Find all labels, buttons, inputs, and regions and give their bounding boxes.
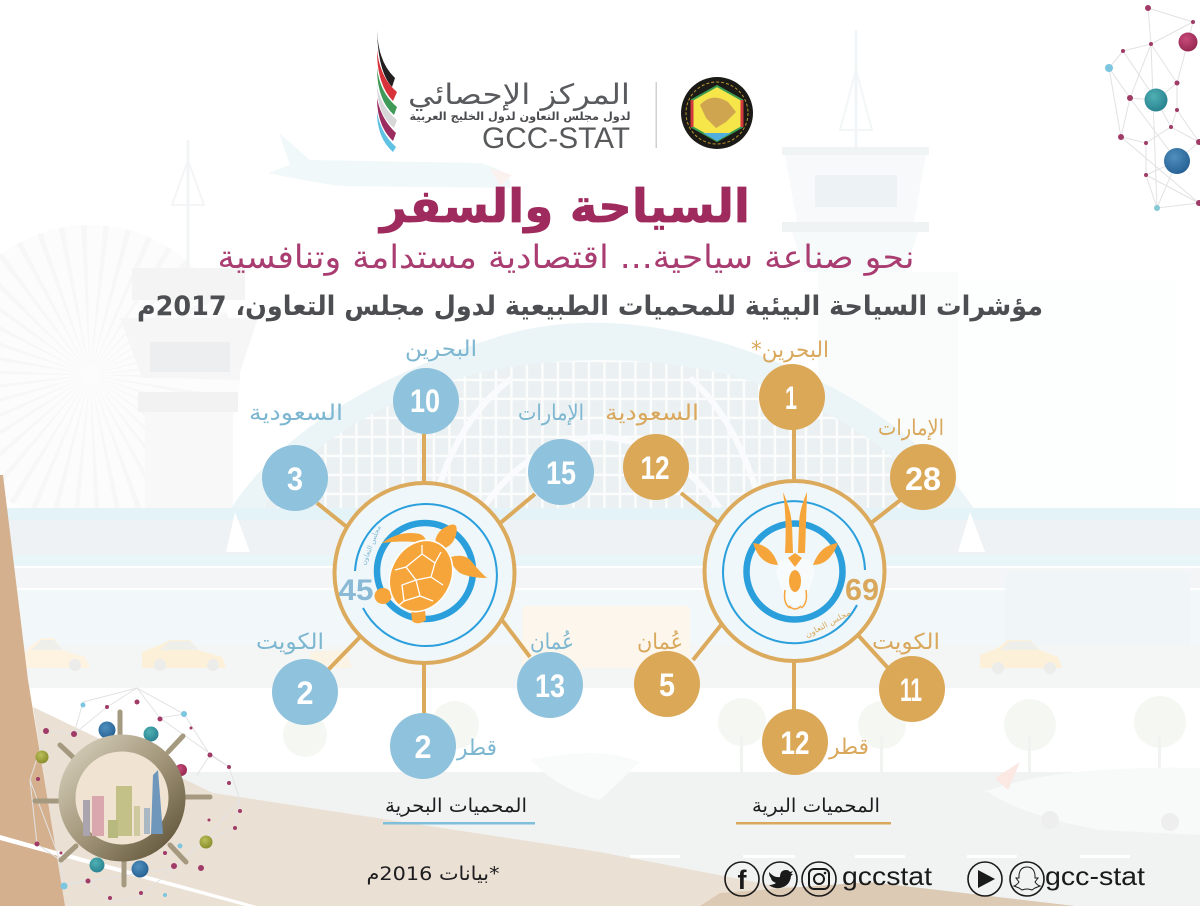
network decoration: top right xyxy=(1105,5,1200,211)
node: UAE: الإمارات xyxy=(878,416,944,441)
icon: facebook xyxy=(725,862,759,896)
hub caption: مجلس التعاون xyxy=(360,524,383,566)
node: Oman: 5 xyxy=(659,667,675,703)
node: Saudi Arabia: السعودية xyxy=(605,401,699,426)
spokes xyxy=(317,430,535,716)
node: Oman xyxy=(634,630,700,717)
node: Saudi Arabia: 3 xyxy=(287,461,303,497)
taxis xyxy=(25,638,1062,674)
icon: snapchat xyxy=(1010,862,1044,896)
network dots xyxy=(34,700,242,900)
logo ribbon stripes xyxy=(377,30,397,152)
left plane wing xyxy=(530,753,640,800)
hub xyxy=(704,481,884,661)
logo: GCC-STAT xyxy=(377,30,753,155)
parked plane xyxy=(985,762,1200,835)
wheel handles xyxy=(35,712,210,885)
title: السياحة والسفر xyxy=(378,179,750,233)
node: Saudi Arabia xyxy=(249,401,343,511)
node: UAE xyxy=(518,401,594,505)
node: Kuwait: الكويت xyxy=(256,630,324,655)
top plane xyxy=(268,133,512,188)
caption: land reserves: المحميات البرية xyxy=(752,795,880,817)
node: Kuwait: الكويت xyxy=(872,630,940,655)
node: Qatar: قطر xyxy=(456,736,497,761)
chart: marine reserves xyxy=(249,337,594,824)
node: Kuwait: 11 xyxy=(900,672,922,708)
node: Oman: عُمان xyxy=(530,630,574,655)
icon: oryx xyxy=(753,492,838,609)
chart: land reserves xyxy=(605,338,956,824)
terminal facade bands xyxy=(6,508,1200,688)
node: Saudi Arabia: 12 xyxy=(640,450,670,486)
icon: turtle xyxy=(374,524,487,623)
node: Bahrain xyxy=(751,338,829,430)
node: Kuwait xyxy=(872,630,945,722)
spokes xyxy=(681,428,903,712)
terminal dome xyxy=(230,323,975,510)
node: Qatar: 12 xyxy=(780,725,810,761)
wheel ring xyxy=(67,743,177,853)
node: UAE xyxy=(878,416,956,510)
caption: marine reserves: المحميات البحرية xyxy=(385,795,527,817)
wheel network xyxy=(30,688,240,902)
icon: twitter xyxy=(763,862,797,896)
handle: gcc-stat: gcc-stat xyxy=(1045,861,1146,891)
node: Saudi Arabia: السعودية xyxy=(249,401,343,426)
node: Oman: 13 xyxy=(535,668,565,704)
icon: youtube xyxy=(968,862,1002,896)
node: UAE: 28 xyxy=(905,461,941,497)
node: Saudi Arabia xyxy=(605,401,699,500)
bottom tan ground xyxy=(0,475,1075,906)
node: Qatar xyxy=(762,709,869,775)
network balls xyxy=(98,722,116,738)
right control tower xyxy=(782,30,1175,510)
node: Kuwait xyxy=(256,630,338,725)
node: Qatar: 2 xyxy=(414,729,432,765)
logo Arabic name: المركز الإحصائي xyxy=(408,78,630,111)
social: gccstat xyxy=(725,861,933,896)
skyline xyxy=(83,770,163,838)
node: Bahrain: البحرين* xyxy=(751,338,829,363)
heading: indicators: مؤشرات السياحة البيئية للمحميات الطبيعية لدول مجلس التعاون، 2017م xyxy=(137,291,1043,322)
runway markings xyxy=(630,855,1130,858)
node: UAE: الإمارات xyxy=(518,401,584,426)
icon: ship wheel with network xyxy=(30,688,242,902)
node: Oman xyxy=(517,630,583,718)
hub caption: مجلس التعاون xyxy=(804,608,852,640)
sun rays xyxy=(0,225,240,525)
social: gcc-stat xyxy=(968,861,1146,896)
logo GCC-STAT wordmark: GCC-STAT xyxy=(482,122,630,155)
node: Bahrain: البحرين xyxy=(405,337,477,362)
total: 45: 45 xyxy=(338,574,374,607)
node: Kuwait: 2 xyxy=(296,675,314,711)
logo divider xyxy=(656,82,657,148)
icon: facebook: f xyxy=(738,865,748,895)
total: 69: 69 xyxy=(845,572,879,607)
node: UAE: 15 xyxy=(546,455,576,491)
left control tower xyxy=(120,140,258,512)
icon: instagram xyxy=(802,862,836,896)
bus xyxy=(522,606,690,668)
node: Bahrain: 1 xyxy=(785,380,797,416)
handle: gccstat: gccstat xyxy=(842,861,933,891)
footnote: *بيانات 2016م xyxy=(366,863,500,885)
node: Bahrain: 10 xyxy=(410,383,440,419)
hub xyxy=(334,483,514,663)
node: Qatar: قطر xyxy=(828,735,869,760)
node: Bahrain xyxy=(393,337,477,434)
trees xyxy=(283,696,1186,775)
node: Oman: عُمان xyxy=(637,630,683,655)
node: Qatar xyxy=(390,713,497,779)
subtitle: نحو صناعة سياحية... اقتصادية مستدامة وتنافسية xyxy=(218,238,914,276)
icon: GCC emblem xyxy=(681,77,753,149)
runway xyxy=(0,772,1200,906)
logo Arabic subtitle: لدول مجلس التعاون لدول الخليج العربية xyxy=(410,110,630,123)
